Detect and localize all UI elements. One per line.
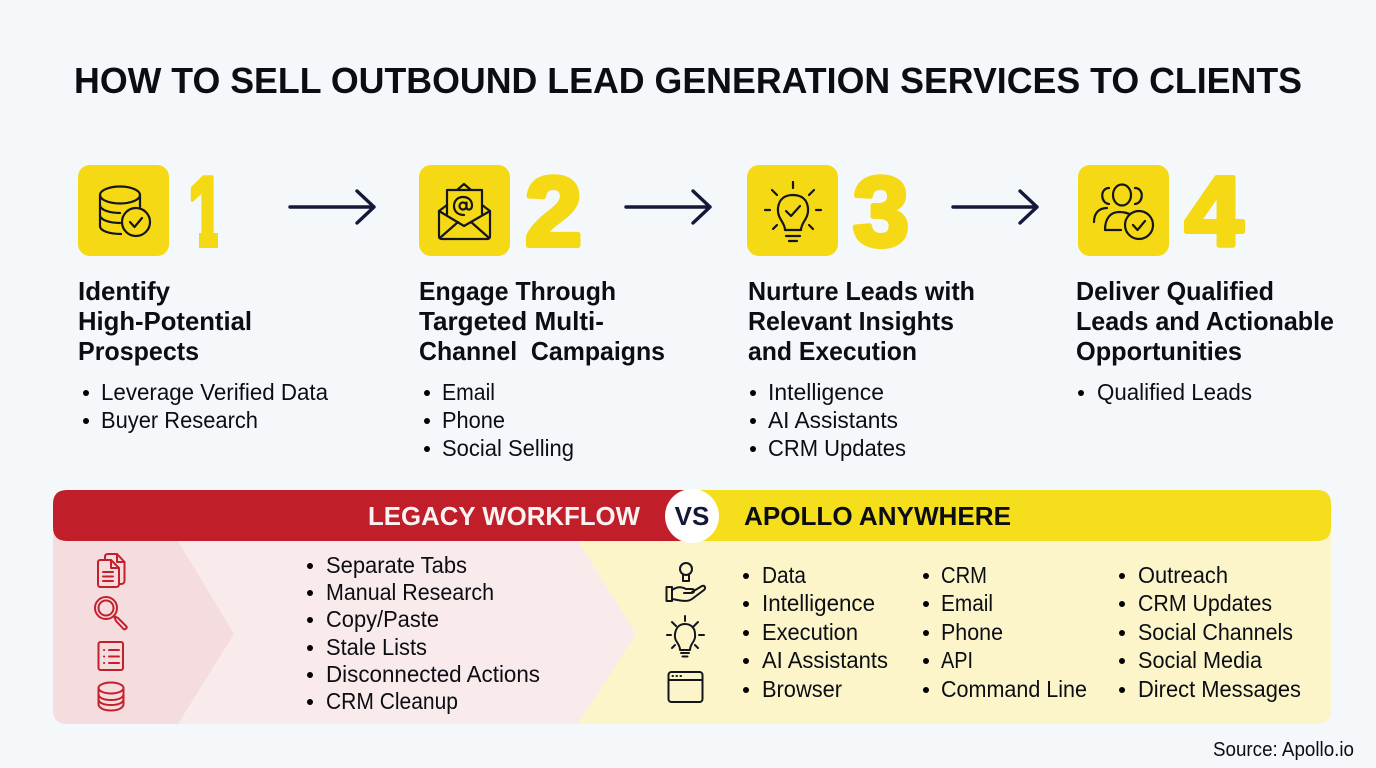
step number 1: 1 <box>188 156 224 266</box>
heading: step 2: Channel Campaigns <box>419 336 665 366</box>
icon: magnifier <box>95 597 127 629</box>
bullet list: Apollo column 3: Outreach <box>1138 562 1228 588</box>
bullet list: Apollo column 3: Social Media <box>1138 647 1262 673</box>
heading: legacy workflow: LEGACY WORKFLOW <box>368 501 640 531</box>
icon: documents <box>98 554 124 587</box>
bullet list: legacy workflow: Disconnected Actions <box>326 661 540 687</box>
VS badge: VS <box>675 501 709 531</box>
header bar: Apollo Anywhere <box>692 490 1331 541</box>
panel: step 1 <box>78 156 328 433</box>
heading: step 2 <box>419 276 665 366</box>
bullet list: Apollo column 2: Phone <box>941 619 1003 645</box>
VS badge <box>665 489 719 543</box>
bullet list: Apollo column 3: Direct Messages <box>1138 676 1301 702</box>
bullet list: step 2: Social Selling <box>442 435 574 461</box>
bullet list: step 3: Intelligence <box>768 379 884 405</box>
bullet list: Apollo column 3: Social Channels <box>1138 619 1293 645</box>
icon: browser window <box>668 672 702 702</box>
arrow: step 1 to 2 <box>290 191 374 223</box>
arrow: step 3 to 4 <box>953 191 1037 223</box>
bullet list: Apollo column 2: API <box>941 647 973 673</box>
bullet list: Apollo column 2 <box>923 562 1087 702</box>
heading: Apollo Anywhere: APOLLO ANYWHERE <box>744 501 1011 531</box>
bullet list: step 4: Qualified Leads <box>1097 379 1252 405</box>
heading: step 1: High-Potential <box>78 306 252 336</box>
bullet list: legacy workflow: Separate Tabs <box>326 552 467 578</box>
bullet list: step 3: AI Assistants <box>768 407 898 433</box>
icon: people with check <box>1078 165 1169 256</box>
icon: lightbulb with check <box>747 165 838 256</box>
heading: step 3: Relevant Insights <box>748 306 954 336</box>
bullet list: step 2: Phone <box>442 407 505 433</box>
bullet list: Apollo column 1: Execution <box>762 619 858 645</box>
title: HOW TO SELL OUTBOUND LEAD GENERATION SERVICES TO CLIENTS <box>74 60 1302 101</box>
bullet list: Apollo column 2: Command Line <box>941 676 1087 702</box>
icon: checklist <box>98 642 123 670</box>
bullet list: Apollo column 2: Email <box>941 590 993 616</box>
bullet list: step 3: CRM Updates <box>768 435 906 461</box>
heading: step 4: Opportunities <box>1076 336 1242 366</box>
source note: Source: Apollo.io <box>1213 739 1354 761</box>
heading: step 4: Leads and Actionable <box>1076 306 1334 336</box>
heading: step 2: Engage Through <box>419 276 616 306</box>
bullet list: step 1 <box>83 379 328 433</box>
heading: step 2: Targeted Multi- <box>419 306 604 336</box>
arrow: step 2 to 3 <box>626 191 710 223</box>
bullet list: legacy workflow: Stale Lists <box>326 634 427 660</box>
heading: step 4: Deliver Qualified <box>1076 276 1274 306</box>
bullet list: Apollo column 3: CRM Updates <box>1138 590 1272 616</box>
heading: step 1: Identify <box>78 276 171 306</box>
step number 3: 3 <box>853 156 909 266</box>
bullet list: legacy workflow: Copy/Paste <box>326 606 439 632</box>
header bar: legacy workflow <box>53 490 692 541</box>
bullet list: Apollo column 1: Intelligence <box>762 590 875 616</box>
icon column: legacy workflow <box>95 554 127 710</box>
icon: database with check <box>78 165 169 256</box>
panel: comparison <box>53 489 1331 724</box>
panel background: Apollo side <box>560 530 1331 724</box>
panel: step 4 <box>1076 156 1334 405</box>
icon: open envelope with at sign <box>419 165 510 256</box>
panel: step 3 <box>747 156 975 461</box>
bullet list: step 1: Buyer Research <box>101 407 258 433</box>
bullet list: Apollo column 1: AI Assistants <box>762 647 888 673</box>
icon: database <box>98 682 124 710</box>
heading: step 3: and Execution <box>748 336 917 366</box>
panel background: legacy chevron <box>53 530 234 724</box>
icon: lightbulb <box>667 616 704 656</box>
bullet list: step 3 <box>750 379 906 461</box>
bullet list: Apollo column 3 <box>1119 562 1301 702</box>
bullet list: step 2 <box>424 379 574 461</box>
bullet list: legacy workflow: CRM Cleanup <box>326 688 458 714</box>
heading: step 4 <box>1076 276 1334 366</box>
bullet list: Apollo column 1: Browser <box>762 676 842 702</box>
heading: step 3 <box>748 276 975 366</box>
bullet list: legacy workflow <box>307 552 540 714</box>
bullet list: legacy workflow: Manual Research <box>326 579 494 605</box>
bullet list: Apollo column 1 <box>743 562 888 702</box>
step number 2: 2 <box>525 156 582 266</box>
step number 4: 4 <box>1185 156 1243 266</box>
icon column: Apollo Anywhere <box>666 563 705 702</box>
bullet list: step 2: Email <box>442 379 495 405</box>
bullet list: Apollo column 2: CRM <box>941 562 987 588</box>
bullet list: Apollo column 1: Data <box>762 562 806 588</box>
heading: step 3: Nurture Leads with <box>748 276 975 306</box>
panel: step 2 <box>419 156 665 461</box>
heading: step 1: Prospects <box>78 336 199 366</box>
heading: step 1 <box>78 276 252 366</box>
panel background: legacy side <box>53 530 636 724</box>
icon: hand with bulb <box>666 563 705 601</box>
bullet list: step 1: Leverage Verified Data <box>101 379 328 405</box>
